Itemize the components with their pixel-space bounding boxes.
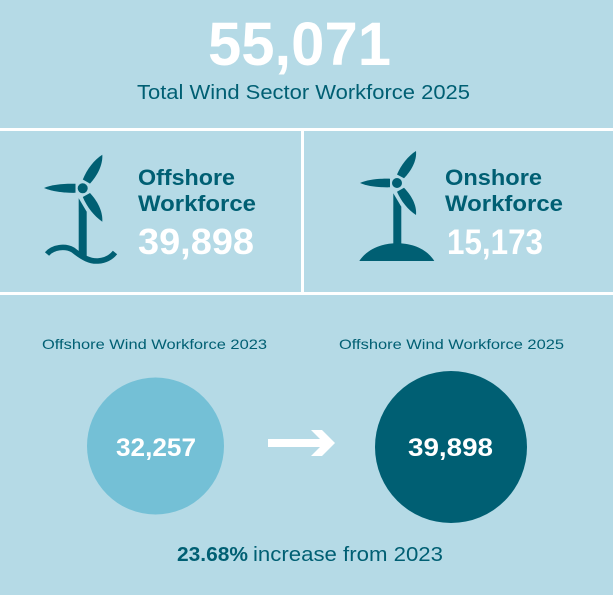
panel: onshore workforce: Workforce: [445, 191, 563, 216]
label: offshore 2023: Offshore Wind Workforce 2023: [42, 336, 267, 352]
subtitle: Total Wind Sector Workforce 2025: [137, 82, 470, 104]
arrow: [268, 430, 335, 456]
circle: 2025 value: 39,898: [408, 434, 493, 462]
panel: offshore workforce: [44, 155, 256, 262]
circle: 2023 value: 32,257: [116, 434, 196, 462]
callout: increase from 2023: [177, 544, 443, 566]
callout: increase from 2023: 23.68%: [177, 544, 248, 566]
heading: offshore workforce: Offshore: [138, 165, 235, 190]
icon: onshore wind turbine: [359, 151, 434, 261]
circle: 2023 value: [87, 378, 224, 514]
panel: onshore workforce: [359, 151, 563, 262]
icon: offshore wind turbine: [44, 155, 115, 261]
circle: 2025 value: [375, 371, 527, 523]
value: onshore workforce: 15,173: [447, 223, 543, 262]
label: offshore 2025: Offshore Wind Workforce 2025: [339, 336, 564, 352]
heading: onshore workforce: Onshore: [445, 165, 542, 190]
panel: offshore workforce: Workforce: [138, 191, 256, 216]
title: total figure: 55,071: [208, 10, 391, 78]
value: offshore workforce: 39,898: [138, 221, 254, 262]
callout: increase from 2023: increase from 2023: [253, 544, 443, 566]
